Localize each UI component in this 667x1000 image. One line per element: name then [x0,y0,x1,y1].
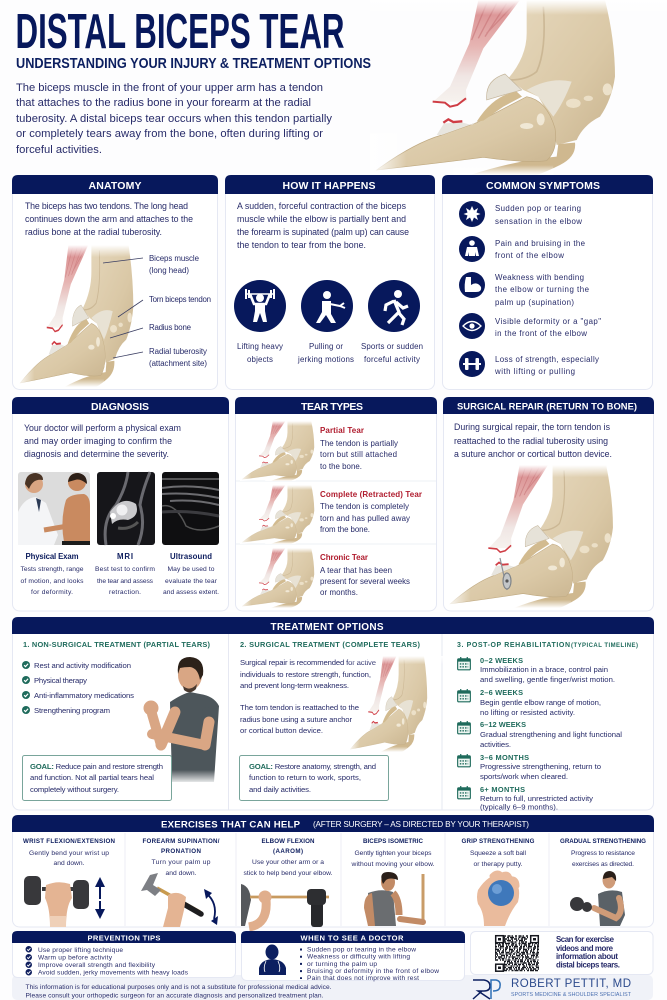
column: surgical treatment: radius bone using a suture anchor [240,715,352,724]
imaging captions: Physical Exam [26,552,79,561]
panel: how it happens: the tendon to tear from the bone. [237,240,366,250]
symptom list [494,204,601,376]
exercise: forearm supination: FOREARM SUPINATION/ [142,838,220,845]
activity captions: jerking motions [297,355,354,364]
warning signs: or turning the palm up [307,961,377,968]
panel: diagnosis: DIAGNOSIS [91,401,149,413]
panel: QR code [470,932,653,974]
exercise: gradual strengthening: GRADUAL STRENGTHENING [560,838,646,845]
timeline: 6-12 weeks [458,720,622,749]
exercise: elbow flexion: ELBOW FLEXION [262,838,315,845]
panel: surgical repair: SURGICAL REPAIR (RETURN TO BONE) [457,400,637,412]
column: surgical treatment: individuals to restore strength, function, [240,670,371,679]
goal box: function to return to work, sports, [249,773,361,782]
exercise: biceps isometric: Gently tighten your biceps [354,850,432,857]
symptom list: palm up (supination) [495,298,574,307]
logo: Robert Pettit MD [473,978,632,999]
exercise: grip strengthening [462,838,535,926]
activity captions: Lifting heavy [237,342,283,351]
timeline: 0-2 weeks: 0–2 WEEKS [480,656,523,665]
intro paragraph: forceful activities. [16,144,102,156]
symptom list: Loss of strength, especially [495,355,599,364]
tear type: chronic: present for several weeks [320,577,410,586]
panel: how it happens: A sudden, forceful contraction of the biceps [237,201,407,211]
image: ultrasound [162,472,219,545]
symptom list: front of the elbow [495,251,564,260]
panel: common symptoms [442,175,653,390]
timeline: 2-6 weeks: 2–6 WEEKS [480,688,523,697]
column: non-surgical treatment: 1. NON-SURGICAL TREATMENT (PARTIAL TEARS) [23,640,211,649]
timeline: 6+ months: (typically 6–9 months). [480,802,558,812]
exercise: forearm supination [141,838,220,927]
exercise: forearm supination: Turn your palm up [152,859,211,866]
goal box: completely without surgery. [30,785,119,794]
photo: man with dumbbell [570,871,625,926]
exercise: wrist flexion: Gently bend your wrist up [29,850,109,857]
panel: how it happens: HOW IT HAPPENS [282,180,376,192]
symptom list: with lifting or pulling [494,367,575,376]
tear type: chronic [240,548,410,608]
panel: how it happens [225,175,435,390]
exercise: gradual strengthening: Progress to resistance [571,850,635,857]
activity captions [237,342,423,364]
exercise: forearm supination: PRONATION [161,848,202,855]
column: surgical treatment: or cortical button device. [240,726,323,735]
exercise: wrist flexion: WRIST FLEXION/EXTENSION [23,838,116,845]
anatomy leader lines and labels: Radial tuberosity [149,347,207,356]
column: post-op rehabilitation: 3. POST-OP REHABILITATION [457,642,570,649]
exercise: wrist flexion: and down. [54,860,85,867]
tear type: partial: The tendon is partially [320,439,398,448]
panel: diagnosis [12,397,229,611]
goal box: GOAL: Restore anatomy, strength, and [249,762,376,771]
tear type: complete: torn and has pulled away [320,514,410,523]
disclaimer [26,984,332,1000]
tear type: chronic: A tear that has been [320,566,392,575]
panel: anatomy: radius bone at the radial tuberosity. [25,227,162,237]
QR caption: distal biceps tears. [556,960,620,970]
imaging captions: the tear and assess [97,578,154,585]
tear type: chronic: or months. [320,588,358,597]
column: surgical treatment: 2. SURGICAL TREATMENT (COMPLETE TEARS) [240,640,421,649]
imaging captions: Best test to confirm [95,566,155,573]
arrow: up and down [95,877,105,919]
icon: dumbbell [459,351,485,377]
exercise: grip strengthening: GRIP STRENGTHENING [462,838,535,845]
warning signs: Bruising or deformity in the front of elbow [307,968,439,975]
goal box [240,756,388,800]
activity captions: Pulling or [309,342,343,351]
timeline: 6+ months: Return to full, unrestricted activity [480,794,593,803]
anatomy leader lines and labels: Biceps muscle [149,254,200,263]
intro paragraph [16,82,332,156]
column: post-op rehabilitation: (TYPICAL TIMELINE) [571,643,638,649]
exercise: biceps isometric: BICEPS ISOMETRIC [363,838,424,845]
timeline: 3-6 months: sports/work when cleared. [480,772,568,781]
panel: diagnosis: diagnosis and determine the severity. [24,449,169,459]
imaging captions: for deformity. [31,589,73,596]
QR caption [556,935,620,970]
exercise: grip strengthening: or therapy putty. [474,861,523,868]
timeline: 6-12 weeks: 6–12 WEEKS [480,720,526,729]
panel: prevention tips [12,931,236,978]
checklist [26,946,189,976]
panel: diagnosis: Your doctor will perform a physical exam [24,423,181,433]
panel: treatment options [12,617,654,812]
goal box [22,756,172,800]
timeline: 6-12 weeks: activities. [480,740,511,749]
symptom list: Sudden pop or tearing [495,204,581,213]
photo: man holding elbow [144,657,223,784]
exercise: gradual strengthening [560,838,646,926]
panel: surgical repair: During surgical repair, the torn tendon is [454,422,611,432]
tear type: complete: The tendon is completely [320,502,409,511]
column: surgical treatment [240,640,444,800]
panel: exercises: EXERCISES THAT CAN HELP [161,820,301,830]
intro paragraph: The biceps muscle in the front of your upper arm has a tendon [16,82,323,94]
icon: person [459,236,485,262]
activity captions: objects [247,355,273,364]
surgical elbow illustration [348,656,444,752]
image: MRI scan [97,472,155,545]
intro paragraph: tuberosity. A distal biceps tear occurs when this tendon partially [16,113,332,125]
icon: weightlifter [234,280,286,332]
panel: anatomy: ANATOMY [88,180,142,192]
QR code [495,935,539,972]
panel: anatomy: The biceps has two tendons. The long head [25,201,188,211]
panel: anatomy: continues down the arm and attaches to the [25,214,193,224]
tear type: partial: torn but still attached [320,450,397,459]
exercise: biceps isometric [350,838,435,926]
panel: treatment options: TREATMENT OPTIONS [270,622,384,633]
panel: diagnosis: and may order imaging to confirm the [24,436,172,446]
panel: how it happens: the forearm is supinated (palm up) can cause [237,227,409,237]
panel: when to see a doctor [241,931,465,982]
intro paragraph: or completely tears away from the bone, often during lifting or [16,128,323,140]
tear type: partial: to the bone. [320,462,362,471]
anatomy elbow illustration [17,245,158,387]
panel: exercises: (AFTER SURGERY – AS DIRECTED BY YOUR THERAPIST) [313,820,529,829]
anatomy leader lines and labels [103,254,211,368]
exercise: wrist flexion [23,838,116,927]
QR caption: information about [556,952,618,961]
symptom list: Visible deformity or a "gap" [495,317,601,326]
symptom list: Weakness with bending [495,273,584,282]
icon: hand squeezing ball [477,873,519,926]
logo: Robert Pettit MD: SPORTS MEDICINE & SHOULDER SPECIALIST [511,992,632,998]
checklist: Physical therapy [34,676,87,685]
anatomy leader lines and labels: Radius bone [149,323,192,332]
icon: eye [459,313,485,339]
subtitle: UNDERSTANDING YOUR INJURY & TREATMENT OPTIONS [16,55,371,72]
hero illustration: elbow with torn tendon [370,0,667,175]
imaging captions [20,552,219,596]
checklist: Warm up before activity [38,954,113,962]
checklist [22,661,134,715]
image: physical exam [18,472,90,545]
tear type: complete: Complete (Retracted) Tear [320,490,422,499]
tear type: complete [240,485,422,544]
icon: dumbbell in hand [24,876,89,927]
icon: flexed arm [459,272,485,298]
checklist: Avoid sudden, jerky movements with heavy loads [38,970,189,976]
imaging captions: evaluate the tear [165,578,218,585]
timeline: 6+ months [458,785,593,812]
timeline: 2-6 weeks: Begin gentle elbow range of motion, [480,698,601,707]
activity captions: forceful activity [364,355,420,364]
timeline: 3-6 months [458,753,601,781]
exercise: elbow flexion [241,838,333,927]
panel: common symptoms: COMMON SYMPTOMS [486,180,600,192]
panel: surgical repair: reattached to the radial tuberosity using [454,436,608,446]
exercise: biceps isometric: without moving your elbow. [350,861,435,868]
imaging captions: May be used to [168,566,215,573]
QR caption: videos and more [556,944,614,953]
panel: tear types [235,397,437,611]
column: surgical treatment: and prevent long-term weakness. [240,681,349,690]
symptom list: the elbow or turning the [495,285,590,294]
checklist: Rest and activity modification [34,661,131,670]
exercise: gradual strengthening: exercises as directed. [572,861,634,868]
symptom list: Pain and bruising in the [495,239,586,248]
logo: Robert Pettit MD: ROBERT PETTIT, MD [511,978,631,990]
column: post-op rehabilitation [457,642,638,812]
QR caption: Scan for exercise [556,935,615,944]
imaging captions: of motion, and looks [20,578,84,585]
panel: footer strip [12,975,653,1000]
warning signs [301,946,439,982]
tear type: partial: Partial Tear [320,426,364,435]
checklist: Anti-inflammatory medications [34,691,134,700]
tear type: partial [240,421,398,481]
exercise: grip strengthening: Squeeze a soft ball [470,850,526,857]
timeline: 2-6 weeks: no lifting or resisted activity. [480,708,575,717]
panel: surgical repair: a suture anchor or cortical button device. [454,449,612,459]
title: DISTAL BICEPS TEAR [16,4,344,59]
activity captions: Sports or sudden [361,342,423,351]
panel: prevention tips: PREVENTION TIPS [88,934,160,942]
tear type: chronic: Chronic Tear [320,553,368,562]
panel: surgical repair [443,397,654,611]
icon: pulling motion [301,280,353,332]
timeline: 3-6 months: Progressive strengthening, return to [480,762,601,771]
imaging captions: Ultrasound [170,552,212,561]
surgical repair illustration [446,465,648,608]
icon: doctor [259,944,286,975]
timeline: 6-12 weeks: Gradual strengthening and light functional [480,730,622,739]
exercise: forearm supination: and down. [166,870,197,877]
exercise: elbow flexion: stick to help bend your elbow. [244,870,333,877]
panel: exercises [12,815,654,927]
icon: burst [459,201,485,227]
timeline: 6+ months: 6+ MONTHS [480,785,525,794]
checklist: Strengthening program [34,706,110,715]
column: surgical treatment: Surgical repair is recommended for active [240,658,376,667]
column: non-surgical treatment [22,640,223,800]
goal box: and daily activities. [249,785,311,794]
symptom list: sensation in the elbow [495,217,582,226]
timeline: 0-2 weeks: and swelling, gentle finger/wrist motion. [480,675,615,684]
panel: anatomy [12,175,218,390]
tear type: complete: from the bone. [320,525,370,534]
anatomy leader lines and labels: (attachment site) [149,359,207,368]
panel: tear types: TEAR TYPES [301,401,363,413]
imaging captions: and assess extent. [163,589,219,596]
column: surgical treatment: The torn tendon is reattached to the [240,703,359,712]
symptom list: in the front of the elbow [495,329,587,338]
warning signs: Weakness or difficulty with lifting [307,954,410,960]
goal box: GOAL: Reduce pain and restore strength [30,762,163,771]
disclaimer: Please consult your orthopedic surgeon for an accurate diagnosis and personalized treatment plan. [26,992,324,1000]
icon: runner [368,280,420,332]
warning signs: Pain that does not improve with rest [307,975,419,982]
timeline: 2-6 weeks [458,688,601,717]
panel: when to see a doctor: WHEN TO SEE A DOCTOR [300,934,404,942]
icon: elbow flexion with stick [241,884,329,927]
imaging captions: MRI [117,552,133,561]
checklist: Improve overall strength and flexibility [38,962,156,969]
goal box: and function. Not all partial tears heal [30,773,154,782]
imaging captions: Tests strength, range [20,566,84,573]
exercise: elbow flexion: Use your other arm or a [252,859,324,866]
anatomy leader lines and labels: Torn biceps tendon [149,295,211,304]
photo: man with stick [364,872,423,926]
anatomy leader lines and labels: (long head) [149,266,189,275]
icon: hammer in hand [141,873,218,927]
timeline: 0-2 weeks: Immobilization in a brace, control pain [480,665,608,674]
timeline: 3-6 months: 3–6 MONTHS [480,753,529,762]
warning signs: Sudden pop or tearing in the elbow [307,946,416,954]
disclaimer: This information is for educational purposes only and is not a substitute for professional medical advice. [26,984,332,991]
intro paragraph: that attaches to the radius bone in your forearm at the radial [16,97,311,109]
checklist: Use proper lifting technique [38,947,123,954]
timeline: 0-2 weeks [458,656,615,684]
imaging captions: retraction. [109,589,141,596]
panel: how it happens: muscle while the elbow is partially bent and [237,214,406,224]
exercise: elbow flexion: (AAROM) [273,848,303,855]
